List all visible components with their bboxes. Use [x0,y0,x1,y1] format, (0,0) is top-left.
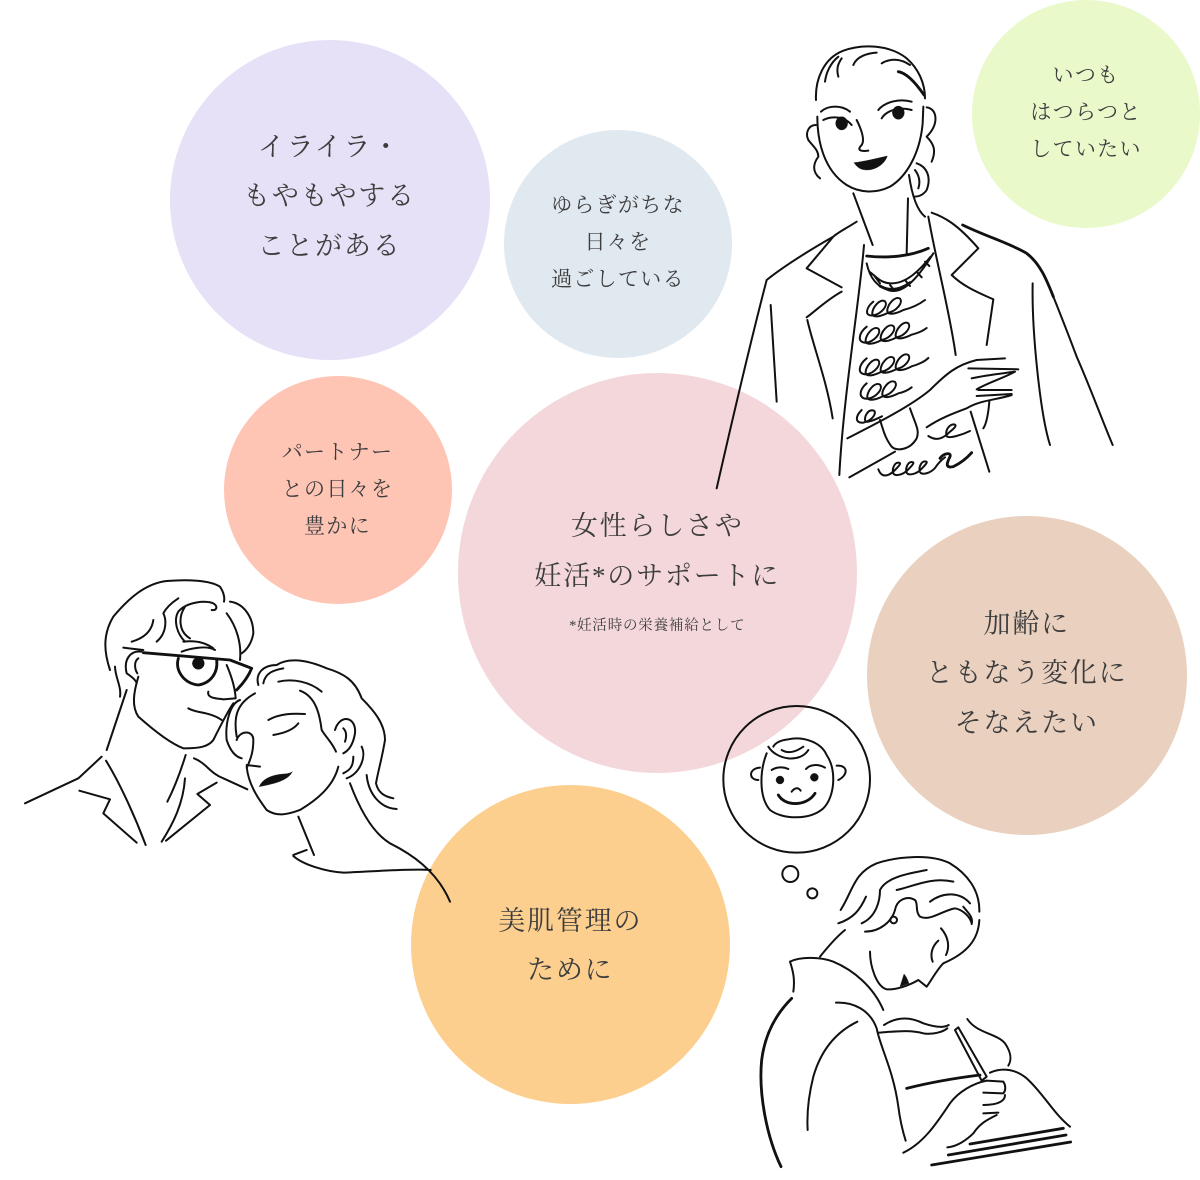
circle: fluctuating days [504,130,732,358]
woman [226,660,450,902]
text: women's health and fertility: 女性らしさや [571,511,744,541]
text: partner: パートナー [282,440,393,464]
text: skin care: ために [527,955,613,985]
text: always lively: いつも [1053,63,1119,87]
text: irritation: イライラ・ [258,132,401,162]
circle: aging [867,516,1186,835]
text: skin care [498,906,642,985]
illustration: woman in jacket [717,46,1113,488]
circle: women's health and fertility [458,373,857,772]
text: women's health and fertility [534,511,780,590]
text: fluctuating days: 日々を [585,230,651,254]
text: fluctuating days: ゆらぎがちな [551,193,685,217]
circle: partner [224,376,452,604]
thought bubble: baby [723,706,870,898]
text: aging: 加齢に [984,608,1070,638]
text: fluctuating days [551,193,685,291]
text: partner: 豊かに [304,514,371,538]
illustration: couple [25,580,450,902]
text: fluctuating days: 過ごしている [551,267,685,291]
text: irritation [243,132,416,260]
circle: always lively [972,0,1200,228]
text: aging: そなえたい [955,708,1099,738]
text: irritation: もやもやする [243,181,416,211]
text: women's health and fertility: 妊活*のサポートに [534,560,780,590]
text: aging [926,608,1128,738]
text: always lively: していたい [1030,137,1142,161]
man [25,580,253,845]
text: aging: ともなう変化に [926,658,1128,688]
illustration: woman writing with thought bubble [723,706,1071,1167]
text: partner [282,440,393,538]
text: irritation: ことがある [258,230,402,260]
footnote: *妊活時の栄養補給として [569,618,745,634]
circle: irritation [170,40,490,360]
text: always lively: はつらつと [1030,100,1142,124]
text: skin care: 美肌管理の [498,906,642,936]
writing woman [761,857,1071,1167]
text: always lively [1030,63,1142,161]
text: partner: との日々を [282,476,393,500]
circle: skin care [410,784,730,1104]
